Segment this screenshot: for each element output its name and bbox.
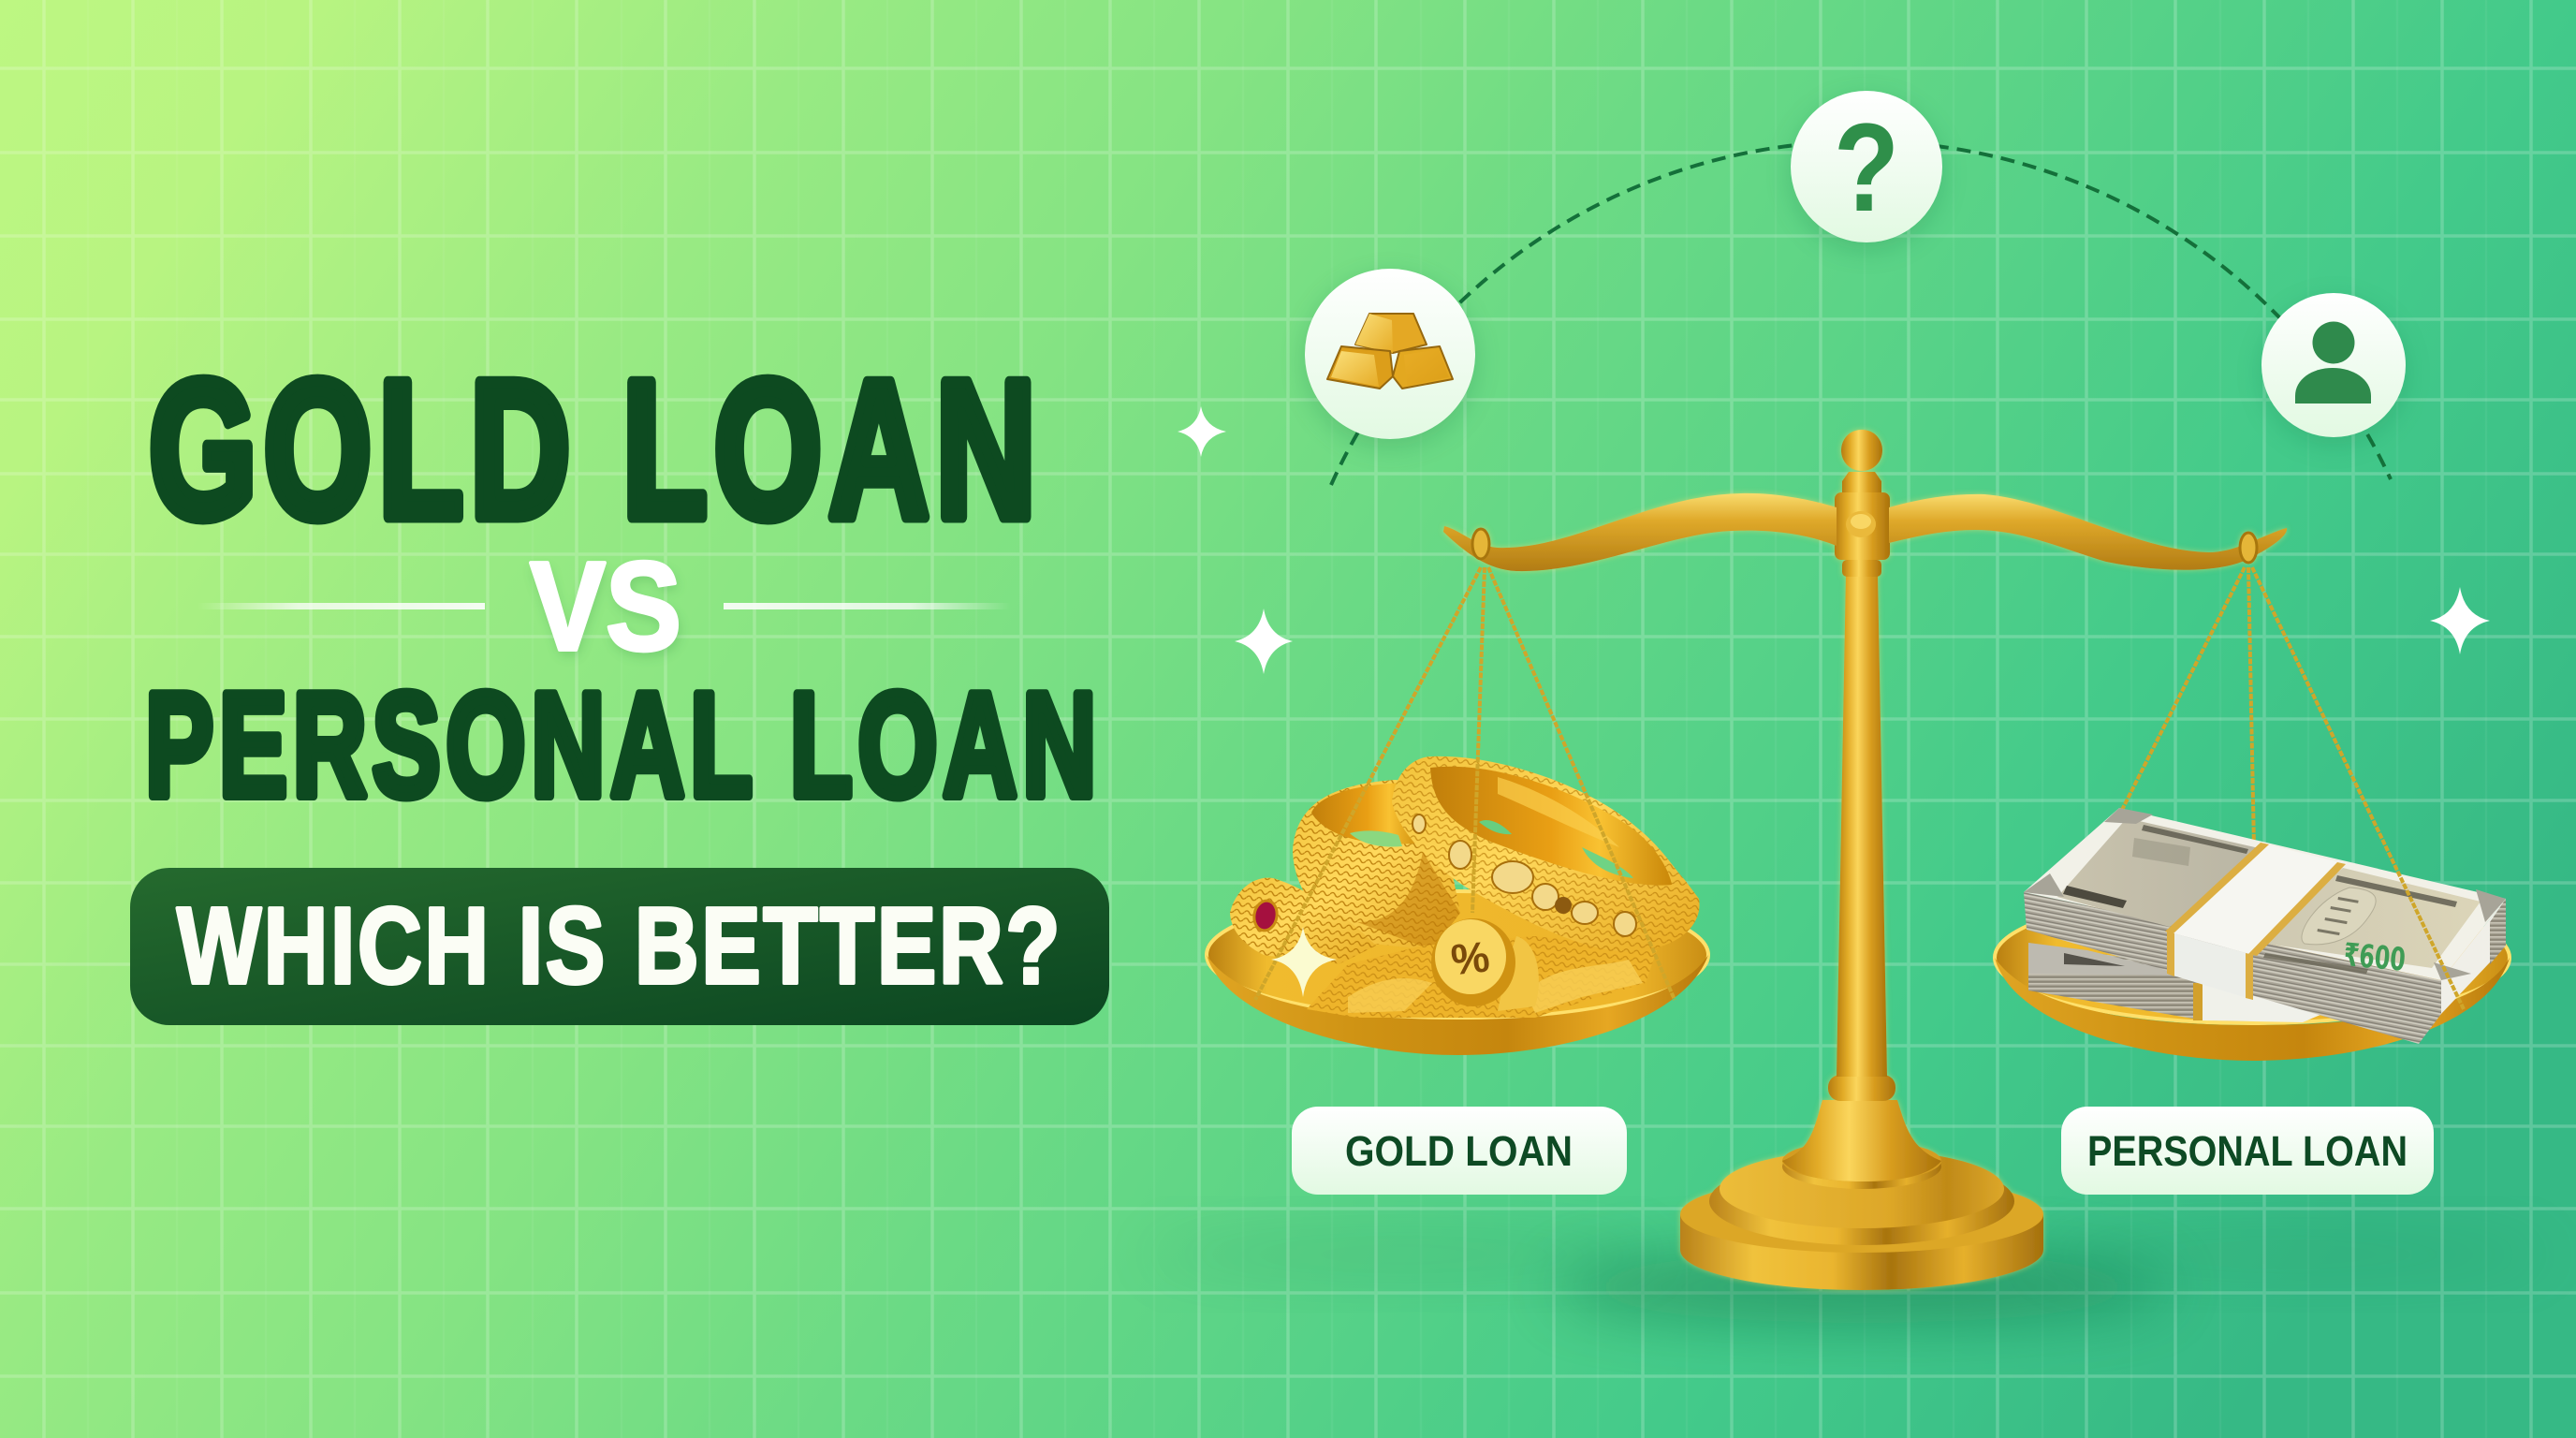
icon: gold bars circle xyxy=(1305,269,1475,447)
floor shadows xyxy=(1142,1232,2555,1323)
badge: which is better xyxy=(130,868,1109,1025)
pan: right xyxy=(1995,892,2510,1061)
coin with percent xyxy=(1431,918,1515,1006)
left pan with jewellery xyxy=(1207,567,1708,1055)
cash bundle: lower xyxy=(2028,943,2340,1022)
bangle: front xyxy=(1392,756,1700,952)
scale column xyxy=(1835,430,1890,1077)
note denomination: ₹600 xyxy=(2342,936,2407,979)
heading: gold loan: GOLD LOAN xyxy=(149,341,1043,559)
label: gold loan: GOLD LOAN xyxy=(1345,1127,1573,1175)
title block xyxy=(130,341,1109,1025)
chains: left pan xyxy=(1255,567,1675,1000)
icon: person circle xyxy=(2261,293,2406,445)
label: gold loan xyxy=(1292,1107,1627,1195)
heading: personal loan: PERSONAL LOAN xyxy=(145,663,1102,828)
right pan with cash xyxy=(1995,567,2510,1061)
vs divider xyxy=(198,536,1011,682)
label: personal loan xyxy=(2061,1107,2434,1195)
bangle beads xyxy=(1412,814,1636,936)
pan: left xyxy=(1207,891,1708,1055)
chains: right pan back xyxy=(2121,567,2254,847)
paper band xyxy=(2165,843,2346,1000)
cash bundle: upper xyxy=(2024,808,2506,1044)
badge: which is better: WHICH IS BETTER? xyxy=(177,885,1062,1006)
ring with ruby xyxy=(1230,878,1376,964)
icon: question mark circle: ? xyxy=(1834,98,1899,238)
scale beam xyxy=(1443,493,2287,571)
gold sparkle xyxy=(1271,927,1337,997)
dashed arc xyxy=(1331,141,2391,485)
icon: question mark circle xyxy=(1791,91,1942,250)
coin with percent: % xyxy=(1449,932,1492,984)
vs divider: VS xyxy=(530,536,681,677)
sparkles xyxy=(1178,406,2490,674)
vs divider: VS xyxy=(531,541,684,682)
label: personal loan: PERSONAL LOAN xyxy=(2087,1127,2408,1175)
jewellery pile xyxy=(1307,936,1657,1018)
chain: right pan front xyxy=(2252,567,2464,1009)
balance scale xyxy=(1443,430,2287,1290)
scale base xyxy=(1680,1075,2043,1290)
bangle: back xyxy=(1293,780,1470,950)
